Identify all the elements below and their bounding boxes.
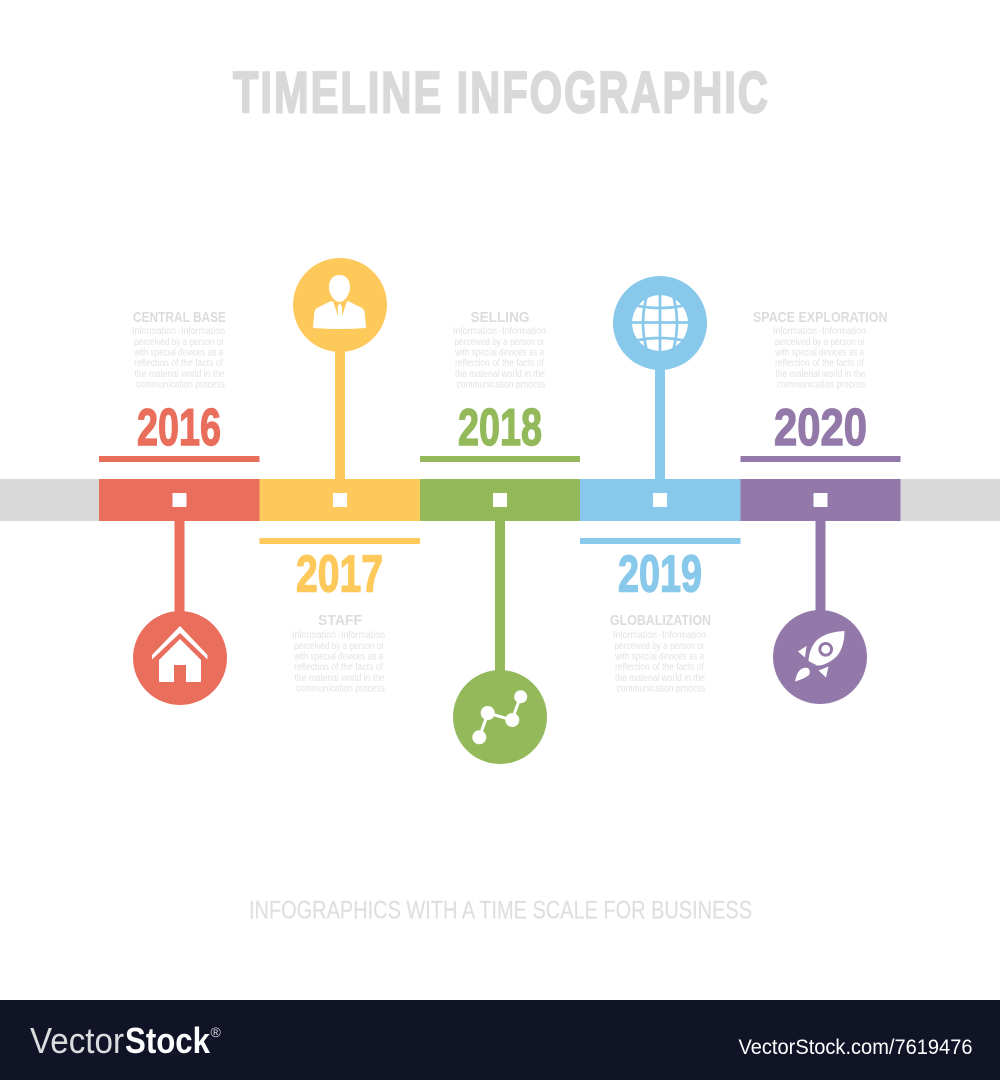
2019 heading: GLOBALIZATION <box>610 612 711 629</box>
2018 rule <box>420 456 580 462</box>
2018 stem <box>495 521 505 676</box>
icon: rocket <box>773 610 867 704</box>
2018 description: with special devices as a <box>454 348 544 358</box>
2017 description: the material world in the <box>294 673 385 684</box>
milestone 2020 <box>740 309 900 704</box>
2017 description: Information -Information <box>292 630 385 641</box>
icon: businessperson <box>293 258 387 352</box>
2018 description: perceived by a person or <box>454 337 545 348</box>
2020 description: communication process <box>777 380 866 390</box>
milestone 2019 <box>580 276 740 694</box>
footer image id: VectorStock.com/7619476 <box>738 1035 973 1059</box>
2019 description: Information -Information <box>613 630 706 641</box>
2019 description: perceived by a person or <box>614 641 705 652</box>
2019 rule <box>580 538 740 544</box>
2017 stem <box>335 345 345 479</box>
2019 description: the material world in the <box>615 673 705 684</box>
footer logo <box>30 1020 222 1061</box>
2019 description: with special devices as a <box>614 652 704 662</box>
timeline band <box>0 479 1000 521</box>
2017 description: with special devices as a <box>293 652 383 662</box>
2018 year: 2018 <box>458 399 542 457</box>
2019 description <box>613 630 706 694</box>
2017 year: 2017 <box>296 546 383 604</box>
2017 heading: STAFF <box>318 612 362 629</box>
2016 stem <box>174 521 184 616</box>
footer logo: Vector <box>30 1020 124 1061</box>
2018 description: communication process <box>456 380 546 390</box>
2019 year: 2019 <box>618 546 702 604</box>
2018 heading: SELLING <box>470 309 530 326</box>
milestone 2016 <box>99 309 260 705</box>
footer logo: Stock <box>125 1020 211 1061</box>
2020 description: perceived by a person or <box>775 337 866 348</box>
2016 heading: CENTRAL BASE <box>133 309 226 326</box>
2018 description: the material world in the <box>455 369 545 380</box>
2019 description: communication process <box>616 684 706 694</box>
2016 description: with special devices as a <box>133 348 223 358</box>
2017 description: communication process <box>296 684 385 694</box>
2016 description: Information -Information <box>132 326 225 337</box>
2016 description <box>132 326 225 390</box>
2020 year: 2020 <box>774 399 867 457</box>
footer logo: ® <box>210 1024 222 1040</box>
title: TIMELINE INFOGRAPHIC <box>233 60 768 125</box>
2018 description: reflection of the facts of <box>455 358 544 369</box>
2016 description: reflection of the facts of <box>134 358 223 369</box>
icon: house <box>133 611 227 705</box>
icon: network graph <box>453 670 547 764</box>
footer bar <box>0 1000 1000 1080</box>
2020 rule <box>740 456 900 462</box>
icon: globe <box>613 276 707 370</box>
2018 description <box>453 326 546 390</box>
2020 description: with special devices as a <box>774 348 864 358</box>
2016 year: 2016 <box>137 399 221 457</box>
2020 description: the material world in the <box>776 369 866 380</box>
2018 description: Information -Information <box>453 326 546 337</box>
2020 description: Information -Information <box>773 326 866 337</box>
2019 stem <box>655 363 665 479</box>
2017 description: reflection of the facts of <box>294 662 383 673</box>
2016 description: communication process <box>136 380 225 390</box>
2016 description: perceived by a person or <box>134 337 225 348</box>
2017 rule <box>260 538 420 544</box>
2020 heading: SPACE EXPLORATION <box>753 309 888 326</box>
2019 description: reflection of the facts of <box>615 662 704 673</box>
2017 description <box>292 630 385 694</box>
2020 description: reflection of the facts of <box>775 358 864 369</box>
milestone 2017 <box>260 258 420 694</box>
subtitle: INFOGRAPHICS WITH A TIME SCALE FOR BUSINESS <box>249 896 752 924</box>
2016 rule <box>99 456 260 462</box>
2020 description <box>773 326 866 390</box>
milestone 2018 <box>420 309 580 764</box>
2016 description: the material world in the <box>134 369 225 380</box>
2017 description: perceived by a person or <box>294 641 385 652</box>
2020 stem <box>816 521 826 616</box>
